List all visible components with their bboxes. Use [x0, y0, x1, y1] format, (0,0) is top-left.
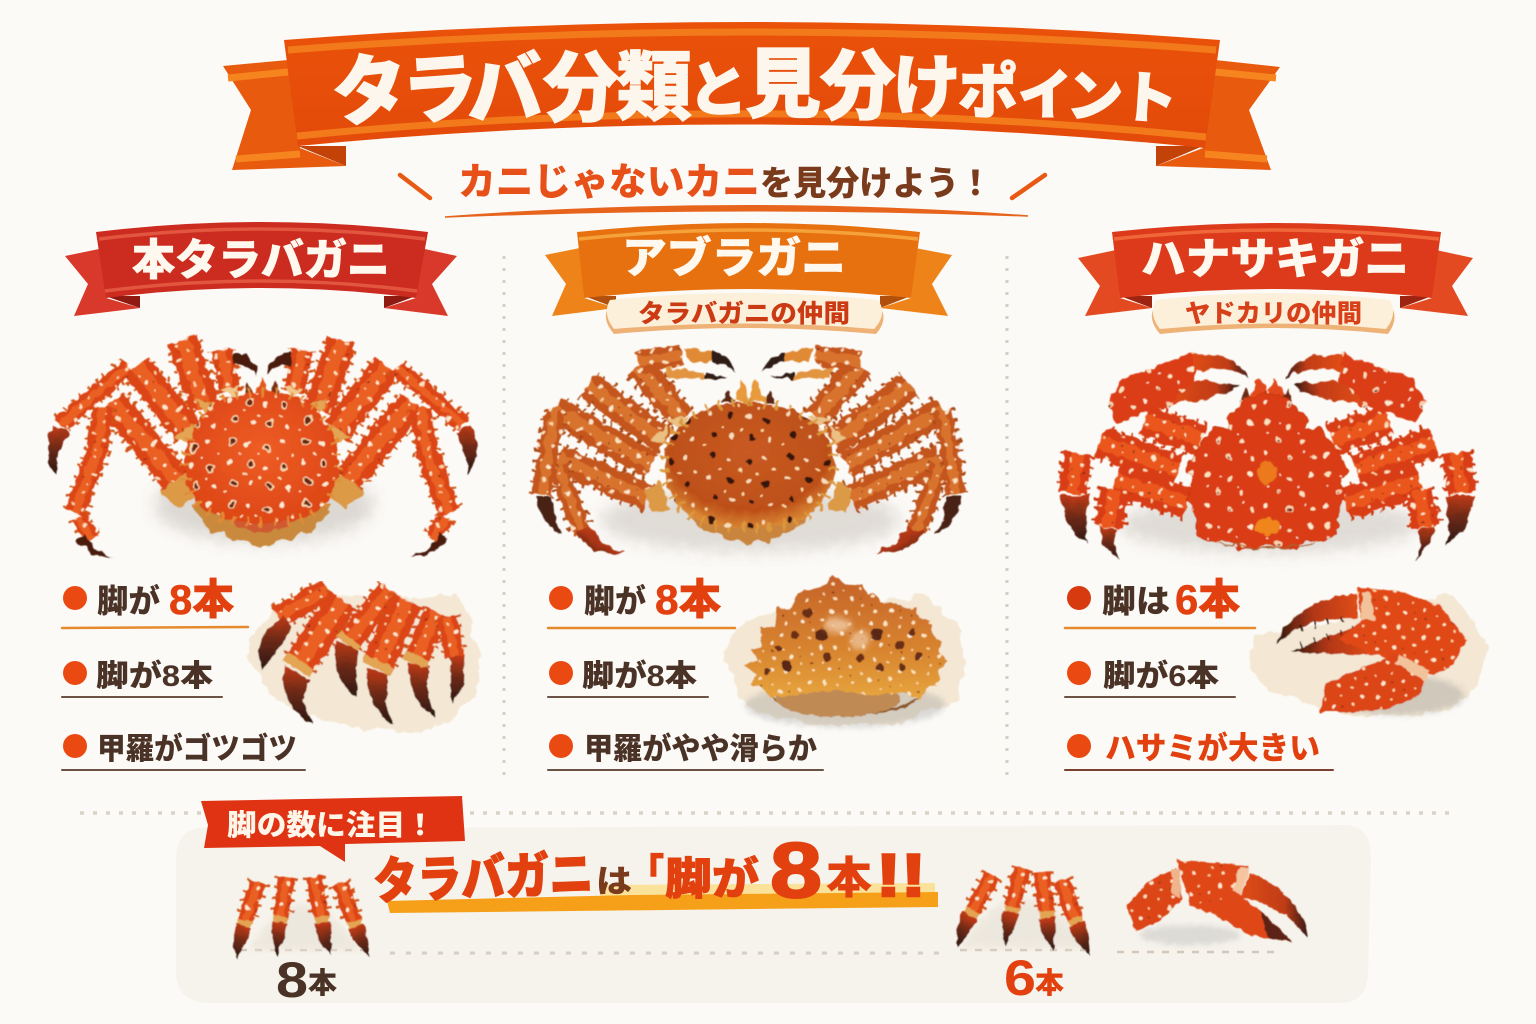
title text: ト [1119, 65, 1179, 132]
highlight stroke [387, 883, 938, 913]
banner: アブラガニ [545, 223, 952, 316]
bullet row: 脚は6本 [1065, 576, 1255, 628]
pill: ヤドカリの仲間 [1152, 293, 1395, 334]
title text: 分 [543, 47, 619, 132]
banner: ハナサキガニ [1078, 223, 1473, 316]
label: アブラガニ [622, 234, 846, 283]
crab illustration: ハナサキガニ [1060, 353, 1474, 560]
feature image: legs [248, 590, 480, 733]
label: ハナサキガニ [1141, 236, 1409, 284]
bullet row: 脚は6本: 脚は [1102, 583, 1170, 619]
bullet row: ハサミが大きい: ハサミが大きい [1105, 731, 1320, 766]
headline: タラバガニは「脚が8本!!: 「 [628, 851, 664, 892]
title text: 分 [820, 45, 896, 130]
dotted separator [80, 811, 1458, 815]
label: 8本: 本 [308, 967, 337, 1000]
bullet row: 脚が8本 (本タラバガニ 1): 脚が [97, 583, 160, 619]
label: 本タラバガニ [132, 237, 390, 285]
bullet row: 脚が8本 (本タラバガニ 1): 8本 [169, 576, 234, 623]
title text: 見 [745, 43, 821, 128]
bottom summary panel [176, 825, 1371, 1003]
title text: ポ [958, 59, 1018, 126]
subtitle [400, 162, 1045, 217]
headline: タラバガニは「脚が8本!!: 8 [770, 826, 822, 914]
label: 6本: 本 [1035, 967, 1064, 1000]
bullet row: 脚が8本 (本タラバガニ 1) [62, 576, 248, 628]
headline: タラバガニは「脚が8本!! [372, 826, 926, 914]
title text: と [688, 57, 748, 124]
bullet row: 脚が6本: 脚が6本 [1103, 659, 1219, 693]
callout: 脚の数に注目！ [201, 796, 465, 862]
title text: ン [1065, 64, 1125, 130]
pill: タラバガニの仲間 [606, 293, 884, 334]
bullet row: 脚が8本 (アブラガニ 2) [548, 659, 708, 697]
label: 8本 [276, 952, 337, 1008]
feature image: claw [1250, 588, 1487, 717]
bullet row: 脚が8本 (本タラバガニ 2): 脚が8本 [96, 659, 213, 693]
feature image: carapace [726, 575, 964, 728]
headline: タラバガニは「脚が8本!!: 本 [826, 854, 872, 903]
headline: タラバガニは「脚が8本!!: !! [876, 842, 926, 909]
headline: タラバガニは「脚が8本!!: タラバガニ [372, 846, 594, 910]
bullet row: 脚は6本: 6本 [1175, 576, 1240, 623]
label: 8本: 8 [276, 952, 308, 1008]
bullet row: 甲羅がゴツゴツ: 甲羅がゴツゴツ [97, 732, 297, 766]
bullet row: 脚が8本 (アブラガニ 2): 脚が8本 [582, 659, 697, 693]
pill: タラバガニの仲間: タラバガニの仲間 [638, 300, 850, 328]
title banner [223, 22, 1280, 170]
crab illustration: アブラガニ [536, 347, 962, 554]
title text: ラ [399, 46, 481, 136]
bullet row: 甲羅がやや滑らか: 甲羅がやや滑らか [584, 732, 817, 766]
icon: claw [1127, 860, 1308, 945]
bullet row: 脚が8本 (アブラガニ 1) [548, 576, 735, 628]
callout: 脚の数に注目！: 脚の数に注目！ [227, 809, 435, 842]
title text: バ [464, 46, 545, 135]
bullet row: 脚が8本 (アブラガニ 1): 8本 [655, 576, 721, 623]
title text: イ [1018, 66, 1072, 126]
icon: four legs, 6本 [947, 866, 1094, 959]
title text: タ [328, 45, 412, 138]
title text: 類 [616, 46, 692, 131]
bullet row: 脚が8本 (アブラガニ 1): 脚が [584, 583, 646, 619]
subtitle: を見分けよう！ [760, 165, 992, 203]
headline: タラバガニは「脚が8本!!: 脚が [665, 854, 759, 904]
pill: ヤドカリの仲間: ヤドカリの仲間 [1185, 300, 1362, 328]
icon: four legs, 8本 [226, 876, 375, 961]
dashed column dividers [504, 256, 1007, 778]
bullet row: 脚が6本 [1065, 659, 1235, 697]
bullet row: 脚が8本 (本タラバガニ 2) [62, 659, 222, 697]
headline: タラバガニは「脚が8本!!: は [596, 863, 632, 899]
banner: 本タラバガニ [65, 222, 457, 316]
subtitle: カニじゃないカニ [458, 162, 760, 204]
label: 6本 [1004, 950, 1064, 1006]
crab illustration: 本タラバガニ [48, 340, 476, 556]
label: 6本: 6 [1004, 950, 1036, 1006]
title text: け [893, 50, 961, 126]
